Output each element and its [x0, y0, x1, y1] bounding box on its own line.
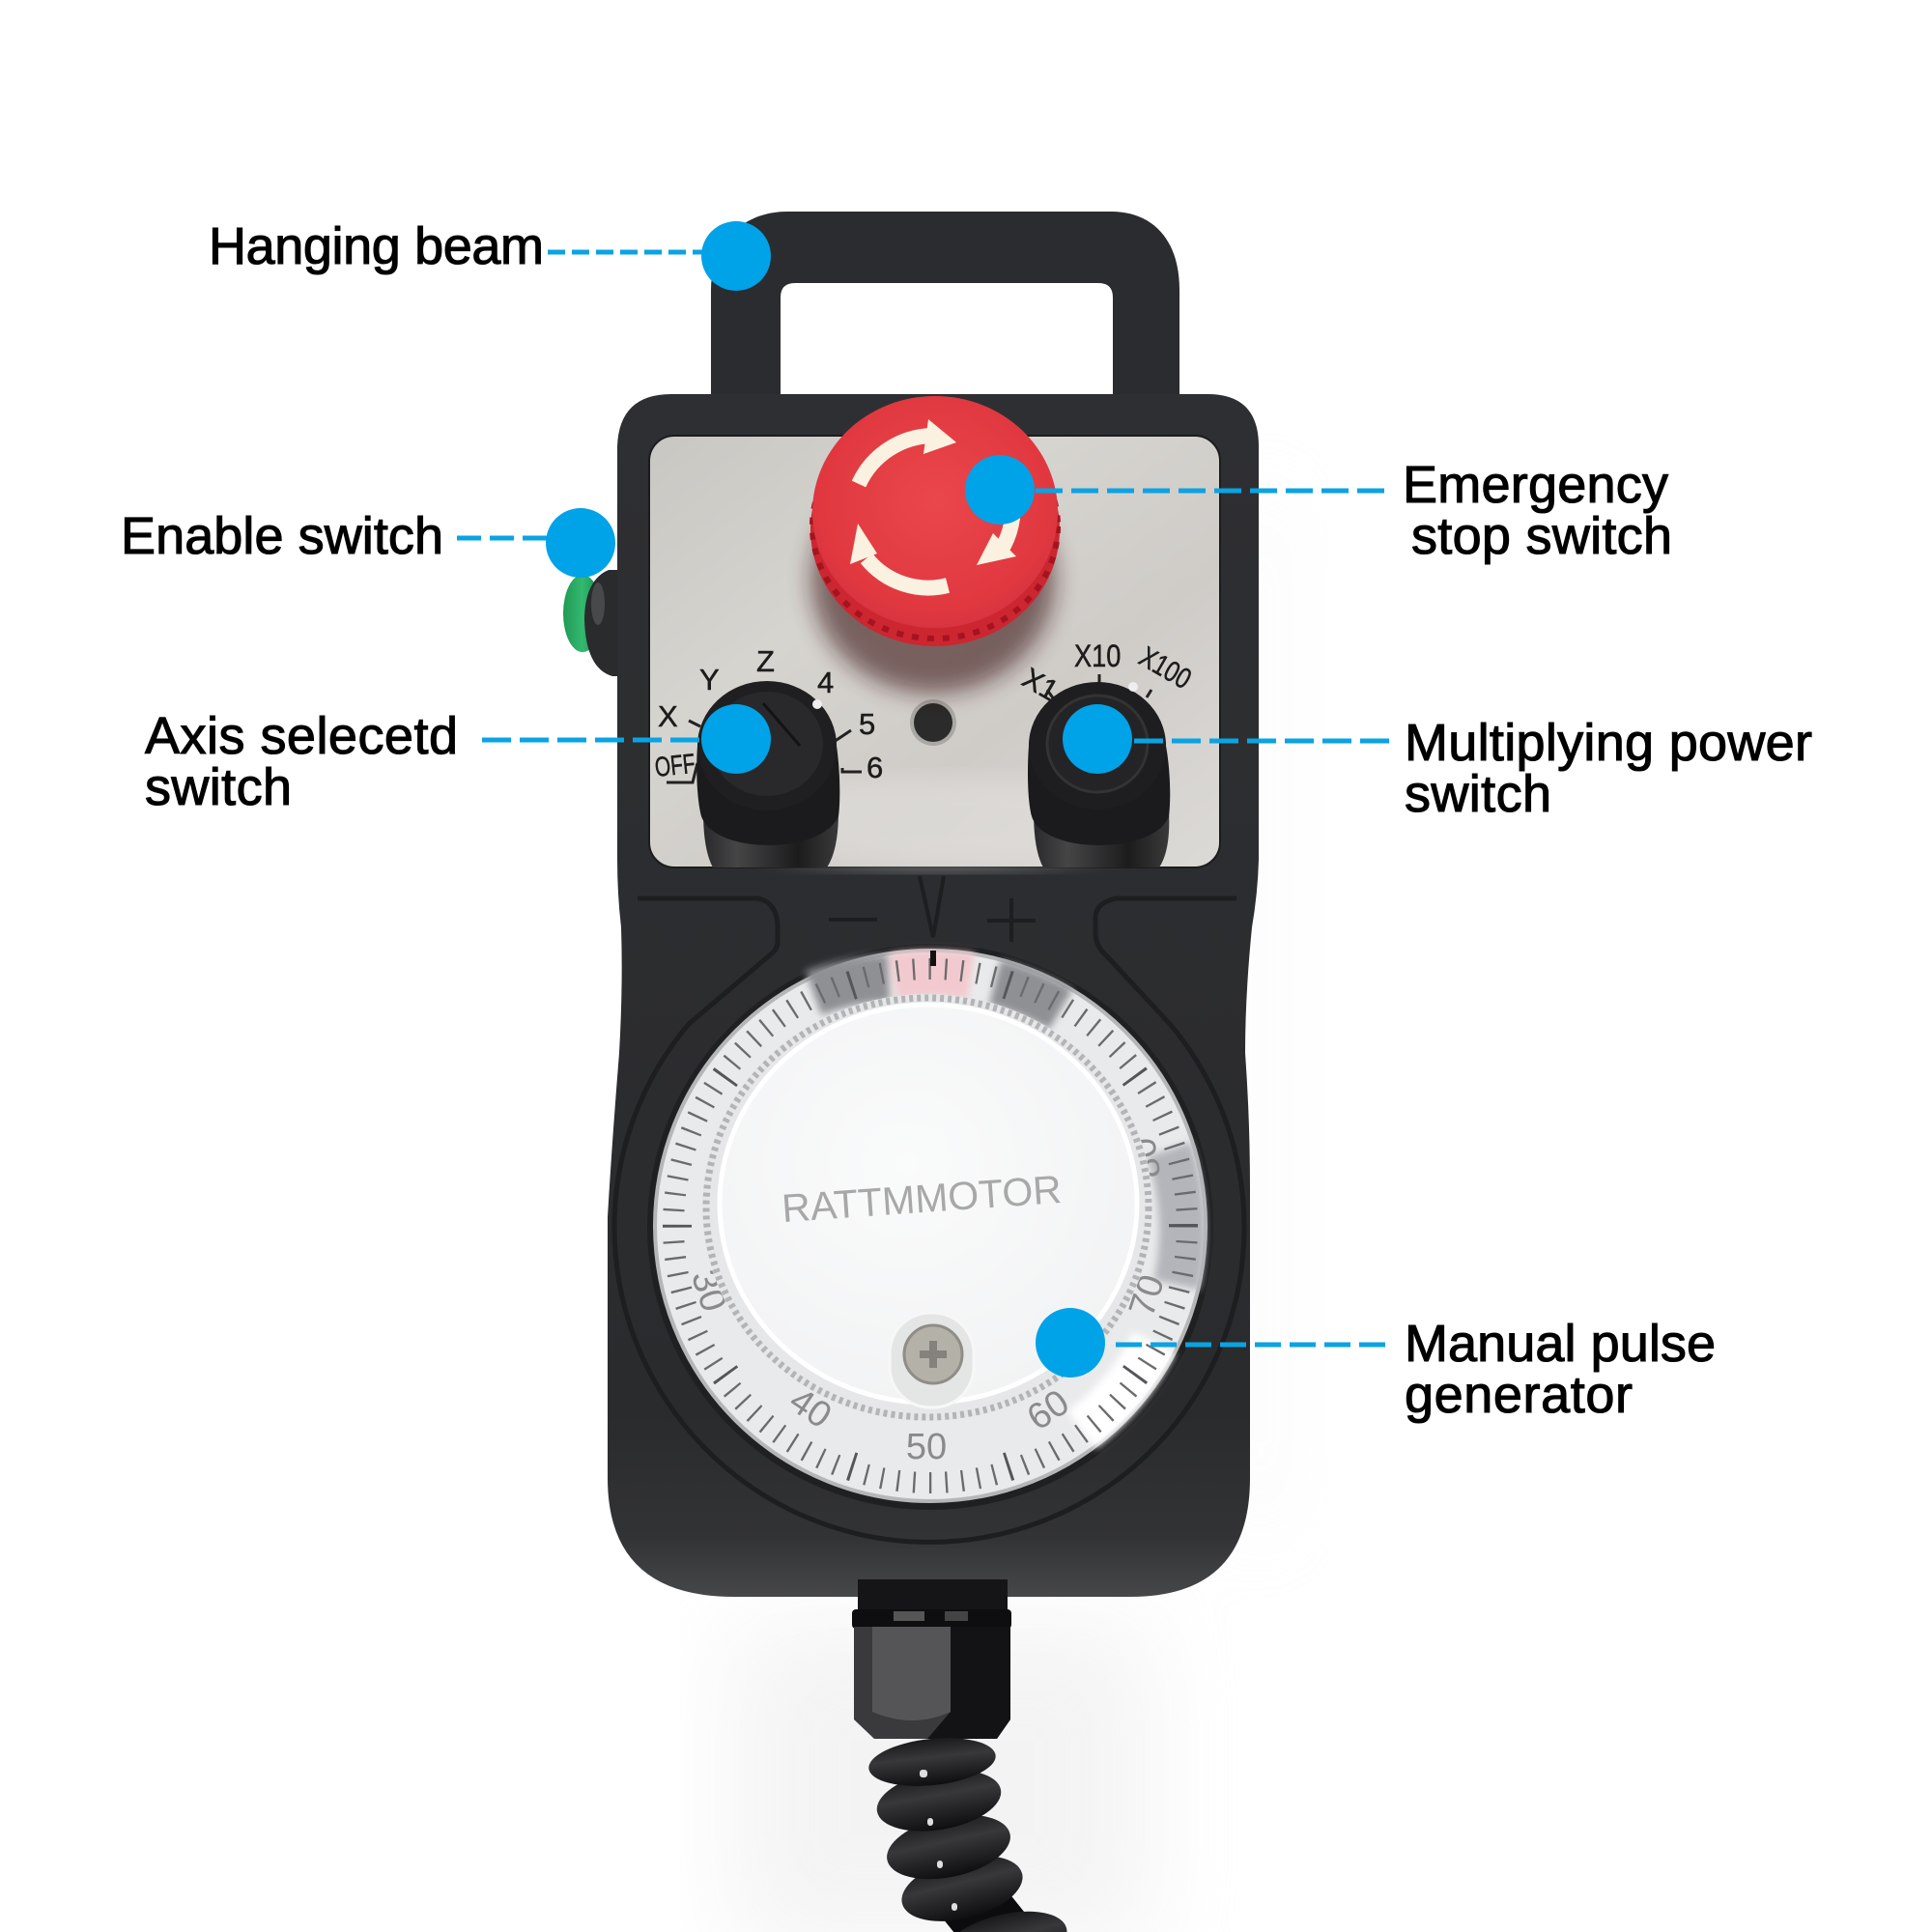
multiplier knob — [1028, 682, 1170, 867]
label: Enable switch — [121, 507, 443, 565]
button shadow — [811, 466, 1055, 694]
direction marks — [829, 876, 1036, 942]
button skirt — [810, 412, 1060, 646]
callout: emergency stop switch: stop switch — [1411, 507, 1672, 565]
button top face — [812, 396, 1058, 628]
scale ticks — [673, 969, 1187, 1483]
plate markings — [653, 639, 1197, 784]
dark halo around the wheel — [647, 944, 1213, 1510]
main body shell — [608, 394, 1259, 1597]
moulded panel contours and ring around the wheel — [614, 898, 1244, 1542]
knurled inner ring — [702, 994, 1152, 1421]
multiplier scale labels — [1016, 639, 1197, 707]
label: Multiplying power — [1405, 714, 1812, 772]
coiled strain relief cable — [867, 1732, 1073, 1932]
leader line — [548, 249, 715, 255]
label: Manual pulse — [1405, 1315, 1716, 1373]
label: Emergency — [1403, 456, 1668, 514]
leader line — [1134, 738, 1389, 744]
scale numbers: 60 — [1020, 1382, 1077, 1438]
hanging beam handle — [711, 212, 1179, 406]
callout: manual pulse generator: generator — [1405, 1366, 1633, 1424]
top metal plate — [649, 436, 1220, 867]
scale numbers: 70 — [1122, 1270, 1173, 1321]
callout: manual pulse generator — [1036, 1308, 1716, 1424]
metallic reflections — [813, 974, 1182, 1430]
axis scale labels: Y — [699, 663, 720, 696]
cable gland — [852, 1579, 1011, 1739]
marker dot — [1063, 704, 1132, 774]
multiplier scale labels: X1 — [1016, 662, 1064, 707]
callout: hanging beam — [209, 217, 771, 291]
leader line — [1116, 1343, 1391, 1347]
wheel rim — [655, 951, 1206, 1501]
screw collar — [890, 1313, 974, 1407]
multiplier scale labels: X100 — [1134, 639, 1197, 696]
marker dot — [546, 508, 615, 578]
inner white disk — [720, 1005, 1137, 1403]
multiplier scale labels: X10 — [1074, 639, 1121, 674]
leader line — [1036, 489, 1387, 493]
enable switch button — [563, 570, 623, 676]
label: Axis selecetd — [145, 707, 458, 765]
scale numbers — [683, 1135, 1173, 1467]
axis scale labels: 6 — [867, 751, 883, 784]
leader line — [482, 738, 699, 742]
plate light patch — [724, 777, 1150, 866]
axis scale labels: Z — [756, 644, 775, 678]
marker dot — [965, 455, 1035, 525]
brand text: RATTMMOTOR — [781, 1167, 1063, 1231]
axis scale labels: 4 — [817, 666, 834, 699]
axis selector knob — [696, 681, 839, 867]
callout: multiplying power switch: switch — [1405, 765, 1551, 823]
scale numbers: 80 — [1122, 1135, 1170, 1182]
axis scale labels: 5 — [859, 707, 875, 741]
marker dot — [701, 221, 771, 291]
callout: axis selected switch — [145, 704, 771, 816]
background soft shadow — [734, 483, 1275, 1932]
axis scale labels: OFF — [653, 749, 696, 783]
marker dot — [1036, 1308, 1105, 1378]
scale numbers: 50 — [906, 1427, 947, 1467]
screw — [904, 1325, 962, 1383]
rotation arrows — [850, 419, 1016, 588]
scale numbers: 30 — [683, 1265, 734, 1317]
center indicator hole — [910, 699, 956, 746]
callout: emergency stop switch — [965, 455, 1672, 565]
emergency stop button — [810, 396, 1060, 694]
scale numbers: 40 — [781, 1380, 838, 1436]
axis scale labels: X — [658, 699, 678, 733]
callout: enable switch — [121, 507, 615, 578]
callout: axis selected switch: switch — [145, 758, 292, 816]
marker dot — [701, 704, 771, 774]
index mark — [930, 951, 936, 966]
callout: multiplying power switch — [1063, 704, 1812, 823]
label: Hanging beam — [209, 217, 544, 275]
handheld pendant device — [563, 212, 1259, 1932]
manual pulse generator wheel — [655, 951, 1206, 1501]
leader line — [457, 535, 551, 541]
axis scale labels — [653, 644, 883, 784]
